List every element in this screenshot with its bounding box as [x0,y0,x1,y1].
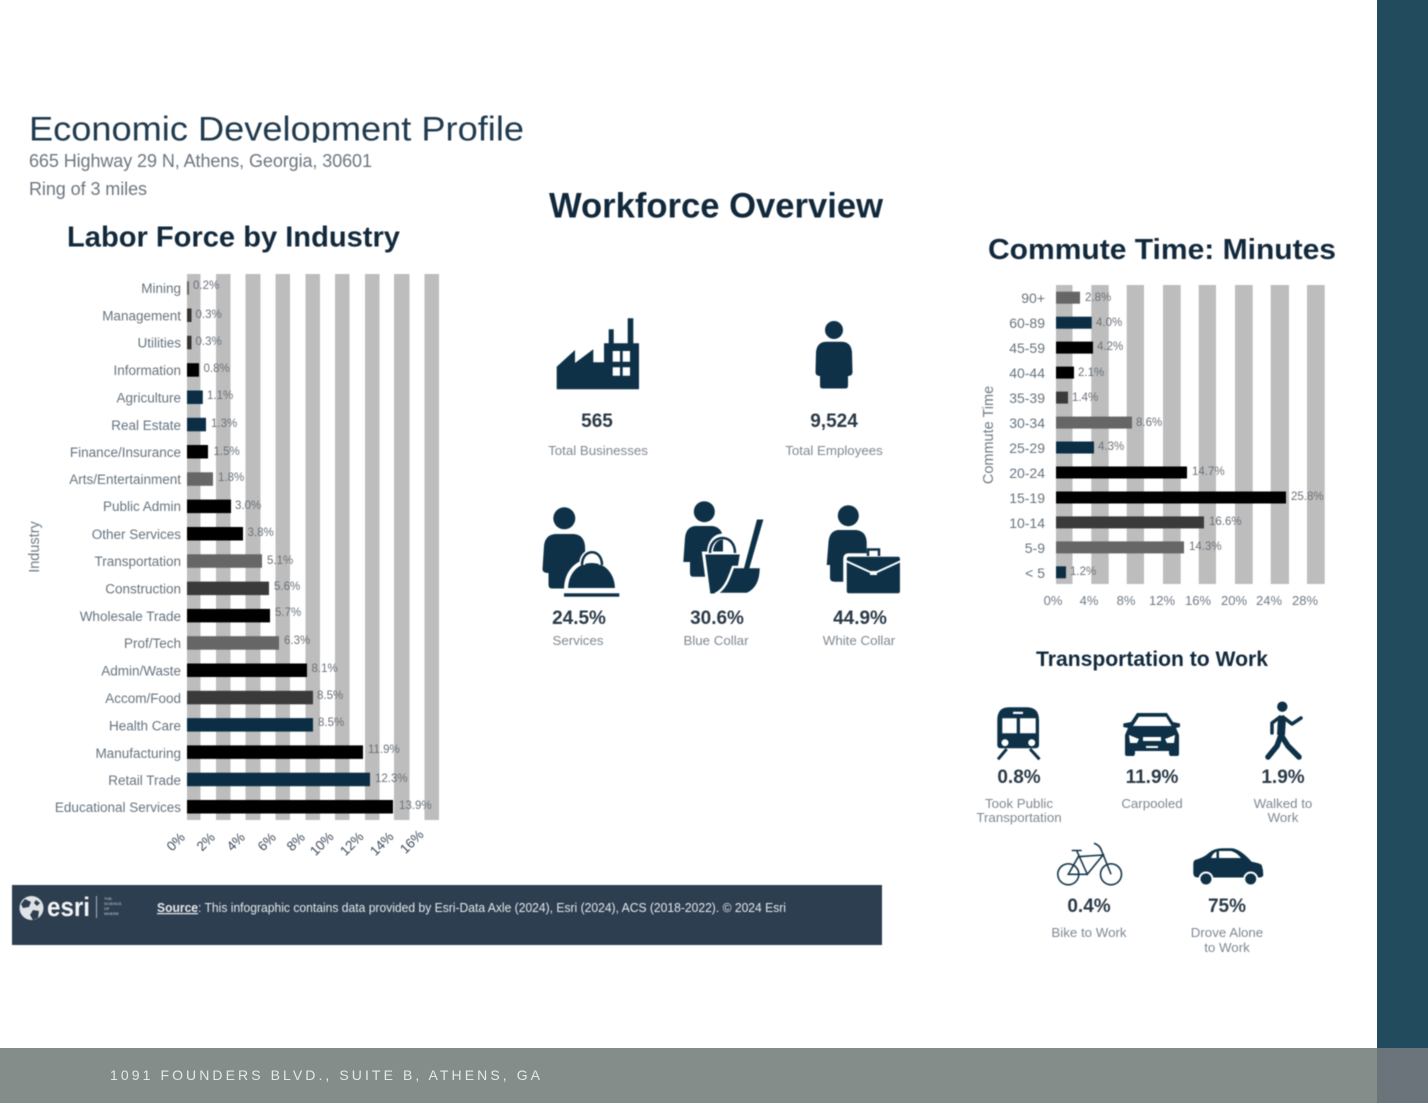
row: manufacturing [95,744,400,761]
bar chart: labor force by industry [27,274,439,859]
stat: walked: Work [1268,810,1299,825]
row: manufacturing: 11.9% [368,744,400,756]
row: real estate [111,418,237,433]
icon: person with bucket and shovel [683,501,765,595]
x axis ticks: 16% [397,827,427,857]
row: 90+: 90+ [1021,290,1045,306]
row: utilities [137,336,222,350]
stat: services: Services [552,633,604,648]
row: finance: Finance/Insurance [70,445,181,460]
icon: walking person [1268,702,1301,757]
footer address: 1091 FOUNDERS BLVD., SUITE B, ATHENS, GA [110,1067,541,1083]
x axis ticks: 24% [1256,593,1282,608]
row: accom/food: Accom/Food [105,691,181,706]
row: health care [109,717,344,734]
row: wholesale: 5.7% [275,607,301,619]
stat: drove alone: 75% [1208,896,1246,917]
x axis ticks [1044,593,1318,608]
stat: bike: 0.4% [1067,896,1111,917]
row: 90+: 2.8% [1085,292,1111,304]
row: 10-14: 10-14 [1009,515,1045,531]
stat: services: 24.5% [552,608,606,629]
row: 5-9 [1025,540,1222,556]
row: agriculture: Agriculture [116,390,181,406]
row: finance: 1.5% [214,446,240,458]
x axis ticks: 14% [367,829,397,859]
row: manufacturing: Manufacturing [95,746,181,761]
esri logo: SCIENCE [104,901,122,906]
row: mining: 0.2% [193,280,219,292]
row: 10-14 [1009,515,1242,531]
row: 45-59: 4.2% [1097,341,1123,353]
row: agriculture: 1.1% [207,390,233,402]
stat: walked [1254,702,1312,825]
esri logo: esri [47,892,90,922]
x axis ticks: 10% [307,829,337,859]
row: 5-9: 14.3% [1189,541,1222,553]
x axis ticks: 0% [164,830,188,854]
bottom footer band [0,1048,1428,1103]
row: health care: Health Care [109,718,181,734]
source banner [12,885,882,945]
stat: carpooled [1121,713,1183,811]
row: 30-34 [1009,415,1162,431]
row: admin/waste [101,663,338,678]
right side band [1377,0,1428,1048]
row: information: Information [113,363,181,378]
row: construction [105,581,300,596]
row: public admin [103,499,261,514]
stat: public transportation: 0.8% [997,767,1041,788]
row: admin/waste: 8.1% [312,663,338,675]
stat: walked: 1.9% [1261,767,1305,788]
x axis ticks: 0% [1044,593,1063,608]
row: construction: 5.6% [274,581,300,593]
row: 15-19: 25.8% [1291,491,1324,503]
source text: Source: This infographic contains data provided by Esri-Data Axle (2024), Esri (2024), ACS (2018-2022). © 2024 Esri [157,901,786,915]
icon: person with cloche [542,507,619,597]
stat: carpooled: 11.9% [1126,767,1179,788]
row: retail trade [108,773,408,788]
stat: total employees: Total Employees [785,443,883,458]
esri logo: OF [104,906,110,911]
row: agriculture [116,390,233,406]
row: 5-9: 5-9 [1025,540,1045,556]
row: 30-34: 30-34 [1009,415,1045,431]
stat: walked: Walked to [1254,796,1312,811]
stat: total employees: 9,524 [810,411,858,432]
row: retail trade: Retail Trade [108,773,181,788]
x axis ticks: 4% [1080,593,1099,608]
stat: bike: Bike to Work [1051,925,1127,940]
axis title: industry: Industry [27,520,43,573]
x axis ticks: 2% [194,830,218,854]
row: information: 0.8% [204,363,230,375]
stat: white collar [823,505,902,648]
x axis ticks: 12% [1149,593,1175,608]
stat: total employees [785,321,883,458]
row: 15-19 [1009,490,1324,506]
row: 35-39: 35-39 [1009,390,1045,406]
stat: white collar: 44.9% [833,608,887,629]
row: prof/tech: Prof/Tech [124,636,181,651]
row: 60-89: 60-89 [1009,315,1045,331]
row: 20-24: 20-24 [1009,465,1045,481]
row: management [102,308,222,324]
stat: drove alone: Drove Alone [1191,925,1263,940]
stat: blue collar [683,501,765,648]
row: management: Management [102,308,181,324]
row: 45-59 [1009,340,1123,356]
stat: public transportation: Took Public [985,796,1053,811]
row: arts: Arts/Entertainment [69,472,181,487]
row: utilities: Utilities [137,336,181,350]
row: other services [92,527,274,542]
row: 25-29: 25-29 [1009,440,1045,456]
stat: carpooled: Carpooled [1121,796,1183,811]
row: public admin: Public Admin [103,499,181,514]
row: information [113,363,230,378]
row: 20-24 [1009,465,1225,481]
heading: transportation to work: Transportation to Work [1036,647,1268,671]
row: management: 0.3% [196,309,222,321]
row: transportation: 5.1% [267,555,293,567]
row: educational services: 13.9% [399,800,432,812]
esri logo: THE [104,896,112,901]
esri logo: WHERE [104,911,119,916]
stat: services [542,507,619,648]
heading: workforce overview: Workforce Overview [549,186,884,226]
row: wholesale: Wholesale Trade [80,609,181,624]
heading: commute time: Commute Time: Minutes [988,234,1336,266]
row: under 5 [1025,565,1096,581]
stat: total businesses: Total Businesses [548,443,648,458]
row: 60-89 [1009,315,1122,331]
stat: total businesses: 565 [581,411,613,432]
row: 90+ [1021,290,1111,306]
icon: factory [557,318,639,389]
icon: person with briefcase [827,505,902,595]
row: wholesale [80,607,301,624]
row: retail trade: 12.3% [375,773,408,785]
row: mining: Mining [141,281,181,296]
ring description: Ring of 3 miles [29,179,147,199]
x axis ticks: 6% [255,830,279,854]
row: 40-44: 2.1% [1078,367,1104,379]
row: 40-44 [1009,365,1104,381]
stat: public transportation [976,707,1062,825]
row: finance [70,445,240,460]
stat: white collar: White Collar [823,633,896,648]
bar chart: commute time [981,285,1325,608]
x axis ticks [164,827,427,859]
row: accom/food [105,690,343,706]
row: prof/tech [124,635,310,651]
row: other services: Other Services [92,527,181,542]
row: 15-19: 15-19 [1009,490,1045,506]
icon: person [816,321,852,388]
row: utilities: 0.3% [196,336,222,348]
row: 30-34: 8.6% [1136,417,1162,429]
stat: total businesses [548,318,648,458]
row: real estate: 1.3% [211,418,237,430]
esri logo [20,892,122,922]
row: mining [141,280,219,296]
title: Economic Development Profile [29,110,524,148]
icon: bicycle [1058,843,1122,885]
x axis ticks: 4% [224,830,248,854]
x axis ticks: 8% [284,830,308,854]
row: 40-44: 40-44 [1009,365,1045,381]
address: 665 Highway 29 N, Athens, Georgia, 30601 [29,151,372,171]
x axis ticks: 20% [1221,593,1247,608]
stat: public transportation: Transportation [976,810,1062,825]
row: prof/tech: 6.3% [284,635,310,647]
row: 45-59: 45-59 [1009,340,1045,356]
row: other services: 3.8% [248,527,274,539]
x axis ticks: 28% [1292,593,1318,608]
row: 35-39 [1009,390,1098,406]
row: health care: 8.5% [318,717,344,729]
x axis ticks: 8% [1117,593,1136,608]
icon: train [997,707,1040,759]
row: arts [69,472,244,487]
stat: blue collar: Blue Collar [683,633,749,648]
row: 20-24: 14.7% [1192,466,1225,478]
row: arts: 1.8% [218,472,244,484]
row: 60-89: 4.0% [1096,317,1122,329]
stat: drove alone: to Work [1204,940,1250,955]
icon: car side [1193,848,1263,886]
row: transportation [94,554,293,569]
row: educational services: Educational Services [55,800,181,815]
x axis ticks: 16% [1185,593,1211,608]
stat: blue collar: 30.6% [690,608,744,629]
row: 35-39: 1.4% [1072,392,1098,404]
stat: bike [1051,843,1127,940]
row: public admin: 3.0% [235,500,261,512]
row: 25-29: 4.3% [1098,441,1124,453]
row: accom/food: 8.5% [317,690,343,702]
icon: car front [1123,713,1180,756]
axis title: commute time: Commute Time [981,386,997,484]
row: 10-14: 16.6% [1209,516,1242,528]
heading: labor force: Labor Force by Industry [67,222,400,254]
row: admin/waste: Admin/Waste [101,664,181,678]
row: transportation: Transportation [94,554,181,569]
row: construction: Construction [105,582,181,596]
row: educational services [55,800,432,815]
x axis ticks: 12% [337,829,367,859]
row: 25-29 [1009,440,1124,456]
row: under 5: < 5 [1025,565,1045,581]
stat: drove alone [1191,848,1263,955]
row: under 5: 1.2% [1070,566,1096,578]
row: real estate: Real Estate [111,418,181,433]
